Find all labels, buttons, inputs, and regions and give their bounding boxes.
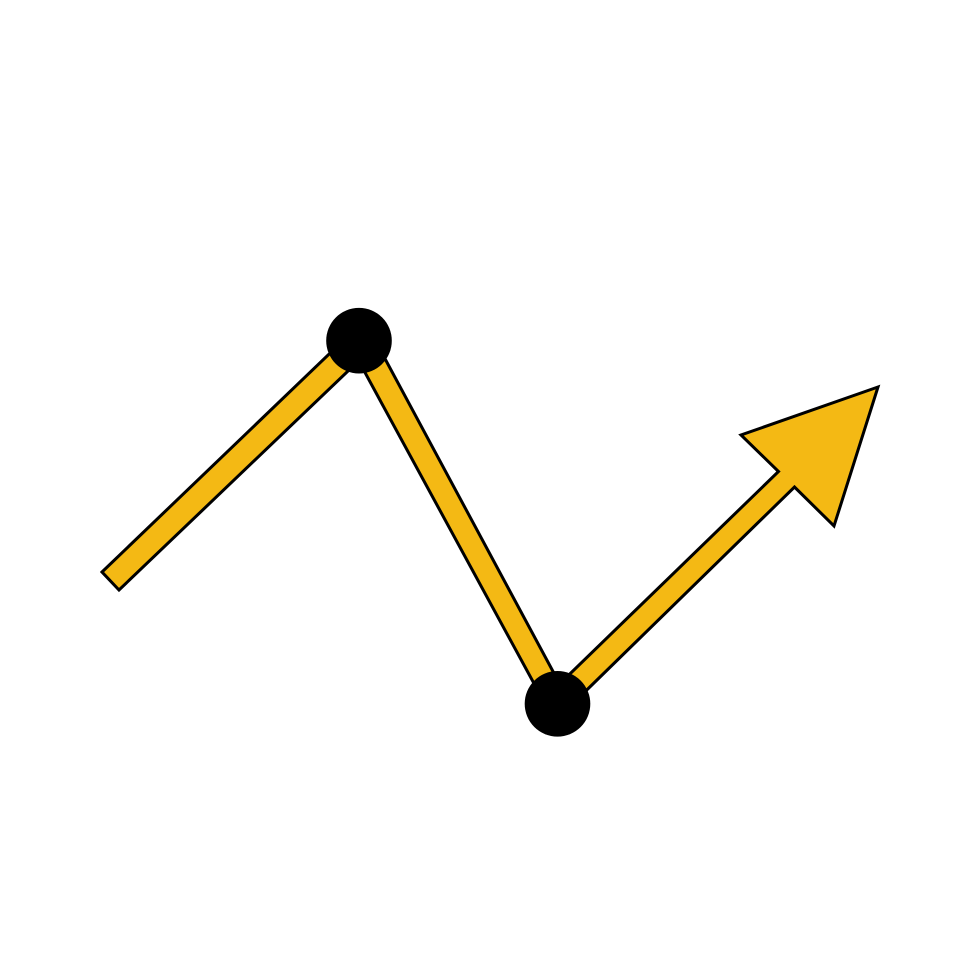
- segment: rising line: [102, 346, 358, 590]
- zigzag arrow chart icon: [102, 308, 878, 737]
- arrow: rising line with arrowhead: [560, 387, 878, 702]
- node: lower dot: [525, 671, 590, 737]
- node: upper dot: [326, 308, 392, 374]
- segment: falling line: [362, 355, 556, 689]
